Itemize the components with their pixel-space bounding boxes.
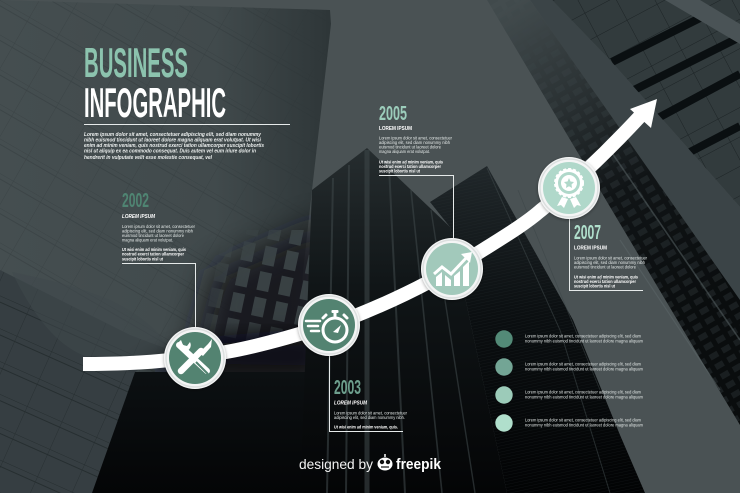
block: 2003: Ut wisi enim ad minim veniam, quis. xyxy=(334,424,398,430)
footer credit: freepik xyxy=(396,456,442,473)
block: 2005: euismod tincidunt ut laoreet dolore xyxy=(379,144,441,150)
legend item 1: Lorem ipsum dolor sit amet, consectetuer adipiscing elit, sed diam xyxy=(525,334,641,338)
footer credit xyxy=(299,454,442,473)
legend item 4: nonummy nibh euismod tincidunt ut laoreet dolore magna aliquam xyxy=(525,422,643,428)
block: 2005: Ut wisi enim ad minim veniam, quis xyxy=(379,160,443,164)
block: 2007: adipiscing elit, sed diam nonummy nibh xyxy=(574,260,645,265)
block: 2005: magna aliquam erat volutpat. xyxy=(379,149,430,154)
intro paragraph: enim ad minim veniam, quis nostrud exerci tation ullamcorper suscipit lobortis xyxy=(84,143,264,149)
block: 2003 xyxy=(334,377,407,430)
block: 2002: Ut wisi enim ad minim veniam, quis xyxy=(122,247,186,252)
legend item 2: nonummy nibh euismod tincidunt ut laoreet dolore magna aliquam xyxy=(525,366,643,372)
block: 2007: euismod tincidunt ut laoreet dolore xyxy=(574,264,636,270)
icon: tools xyxy=(164,327,226,389)
block: 2005: LOREM IPSUM xyxy=(379,126,412,132)
block: 2005: suscipit lobortis nisl ut xyxy=(379,168,420,174)
block: 2007: nostrud exerci tation ullamcorper xyxy=(574,279,636,284)
block: 2005: 2005 xyxy=(379,103,407,125)
block: 2002: LOREM IPSUM xyxy=(122,214,156,220)
timeline arrow xyxy=(83,99,657,364)
intro paragraph: Lorem ipsum dolor sit amet, consectetuer adipiscing elit, sed diam nonummy xyxy=(84,132,262,138)
icon: freepik mascot xyxy=(378,454,392,470)
block: 2007: Ut wisi enim ad minim veniam, quis xyxy=(574,274,638,280)
legend item 1 xyxy=(495,330,643,348)
title xyxy=(84,39,226,126)
text: INFOGRAPHIC xyxy=(84,79,226,126)
legend item 3: nonummy nibh euismod tincidunt ut laoreet dolore magna aliquam xyxy=(525,394,643,400)
block: 2002: adipiscing elit, sed diam nonummy nibh xyxy=(122,228,193,234)
legend xyxy=(495,330,643,432)
block: 2005: Lorem ipsum dolor sit amet, consectetuer xyxy=(379,136,452,140)
block: 2003: Lorem ipsum dolor sit amet, consectetuer xyxy=(334,410,407,416)
footer credit: designed by xyxy=(299,456,373,472)
block: 2005: adipiscing elit, sed diam nonummy nibh xyxy=(379,140,450,145)
block: 2005: nostrud exerci tation ullamcorper xyxy=(379,164,441,169)
intro paragraph xyxy=(84,132,264,161)
intro paragraph: hendrerit in vulputate velit esse molestie consequat, vel xyxy=(84,155,212,161)
icon: award rosette xyxy=(538,157,600,219)
icon: growth chart xyxy=(421,238,483,300)
legend item 2 xyxy=(495,358,643,376)
block: 2007 xyxy=(574,222,647,288)
legend item 4: Lorem ipsum dolor sit amet, consectetuer adipiscing elit, sed diam xyxy=(525,418,641,422)
block: 2007: LOREM IPSUM xyxy=(574,246,607,252)
block: 2007: suscipit lobortis nisl ut xyxy=(574,284,615,288)
legend item 3: Lorem ipsum dolor sit amet, consectetuer adipiscing elit, sed diam xyxy=(525,390,641,394)
block: 2007: 2007 xyxy=(574,222,601,244)
block: 2003: 2003 xyxy=(334,377,361,399)
block: 2002: Lorem ipsum dolor sit amet, consectetuer xyxy=(122,224,195,229)
legend item 2: Lorem ipsum dolor sit amet, consectetuer adipiscing elit, sed diam xyxy=(525,362,641,366)
block: 2002: 2002 xyxy=(122,190,149,212)
block: 2003: adipiscing elit, sed diam nonummy nibh. xyxy=(334,415,405,420)
block: 2007: Lorem ipsum dolor sit amet, consectetuer xyxy=(574,256,647,260)
block: 2002: euismod tincidunt ut laoreet dolore xyxy=(122,233,184,238)
intro paragraph: nisl ut aliquip ex ea commodo consequat. Duis autem vel eum iriure dolor in xyxy=(84,148,257,154)
icon: stopwatch xyxy=(298,294,360,356)
block: 2003: LOREM IPSUM xyxy=(334,400,368,406)
legend item 1: nonummy nibh euismod tincidunt ut laoreet dolore magna aliquam xyxy=(525,338,643,344)
legend item 3 xyxy=(495,386,643,404)
intro paragraph: nibh euismod tincidunt ut laoreet dolore magna aliquam erat volutpat. Ut wisi xyxy=(84,138,261,144)
block: 2002: nostrud exerci tation ullamcorper xyxy=(122,252,184,256)
block: 2002: magna aliquam erat volutpat. xyxy=(122,238,173,242)
title: BUSINESS xyxy=(84,39,188,86)
block: 2002 xyxy=(122,190,195,262)
block: 2002: suscipit lobortis nisl ut xyxy=(122,256,163,262)
legend item 4 xyxy=(495,414,643,432)
block: 2005 xyxy=(379,103,452,174)
